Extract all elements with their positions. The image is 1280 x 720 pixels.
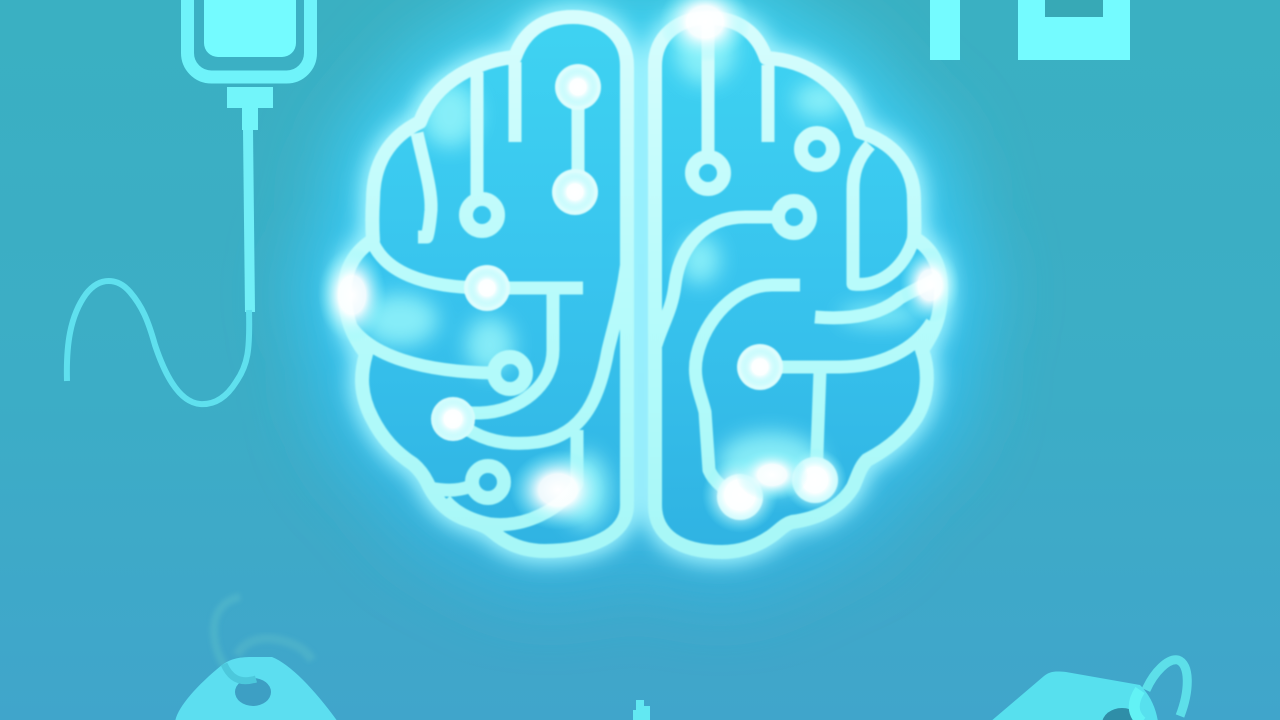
bright sparkles [318,0,960,533]
ring nodes [466,133,833,498]
inner light patches [362,16,920,528]
brain with circuit lines [318,0,960,552]
tight outline glow [345,17,941,552]
right traces [656,20,938,497]
solid nodes [431,64,838,520]
left traces [352,62,627,525]
right hemisphere outline [655,18,941,552]
hemisphere fills [345,17,941,552]
icon: price tag bottom left [175,597,338,720]
icon: IV drip bag and tube [67,0,310,404]
hemisphere lines and traces [345,17,941,552]
blue halo behind brain [345,17,941,552]
icon: price tag bottom right [990,660,1187,720]
icon: cropped shape top right [930,0,1130,60]
icon: small fragment bottom centre [633,700,650,720]
left hemisphere outline [345,17,627,551]
